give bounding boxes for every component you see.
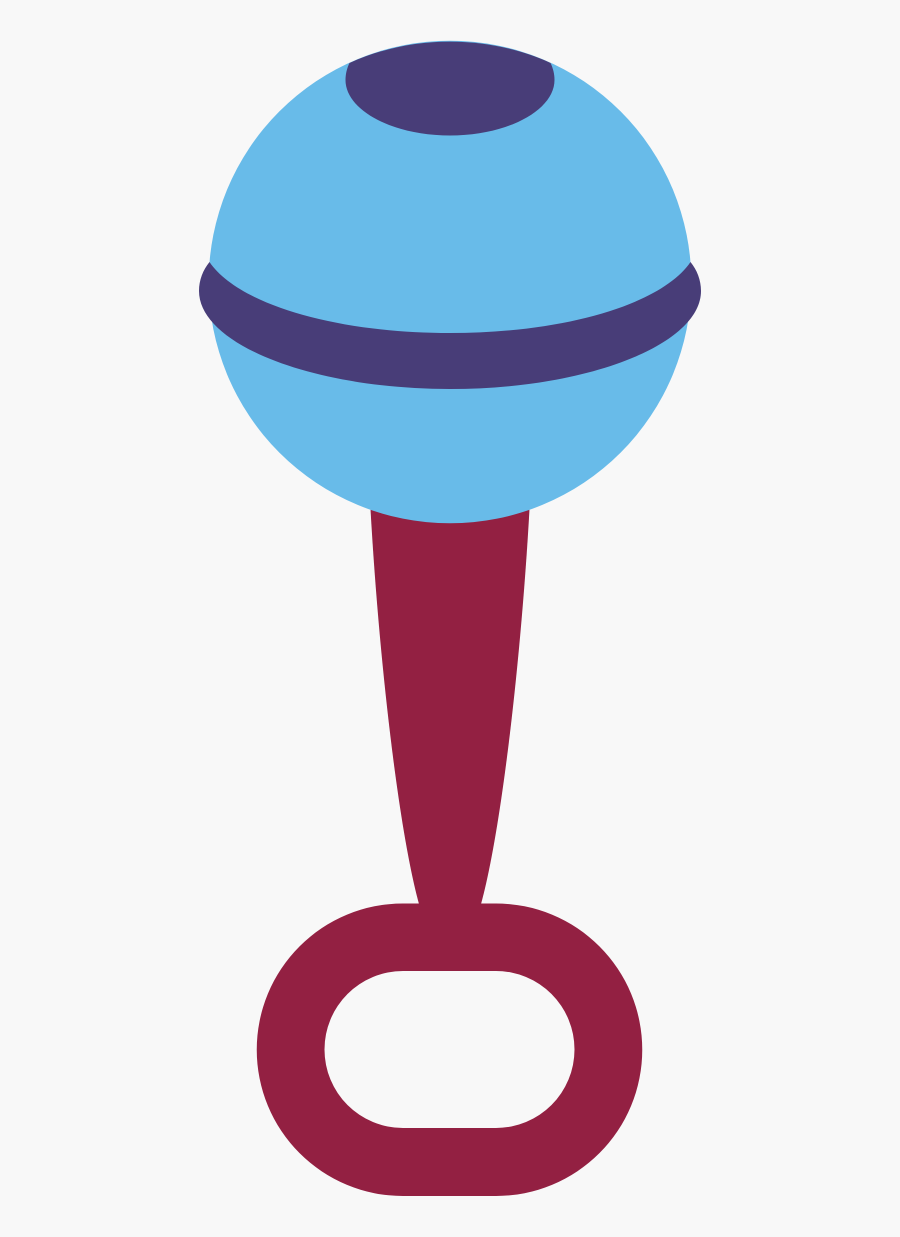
- rattle head sphere: [209, 41, 691, 523]
- top cap: [346, 42, 554, 136]
- rattle handle ring: [257, 904, 642, 1196]
- middle band: [199, 262, 701, 389]
- rattle handle stem: [370, 500, 530, 904]
